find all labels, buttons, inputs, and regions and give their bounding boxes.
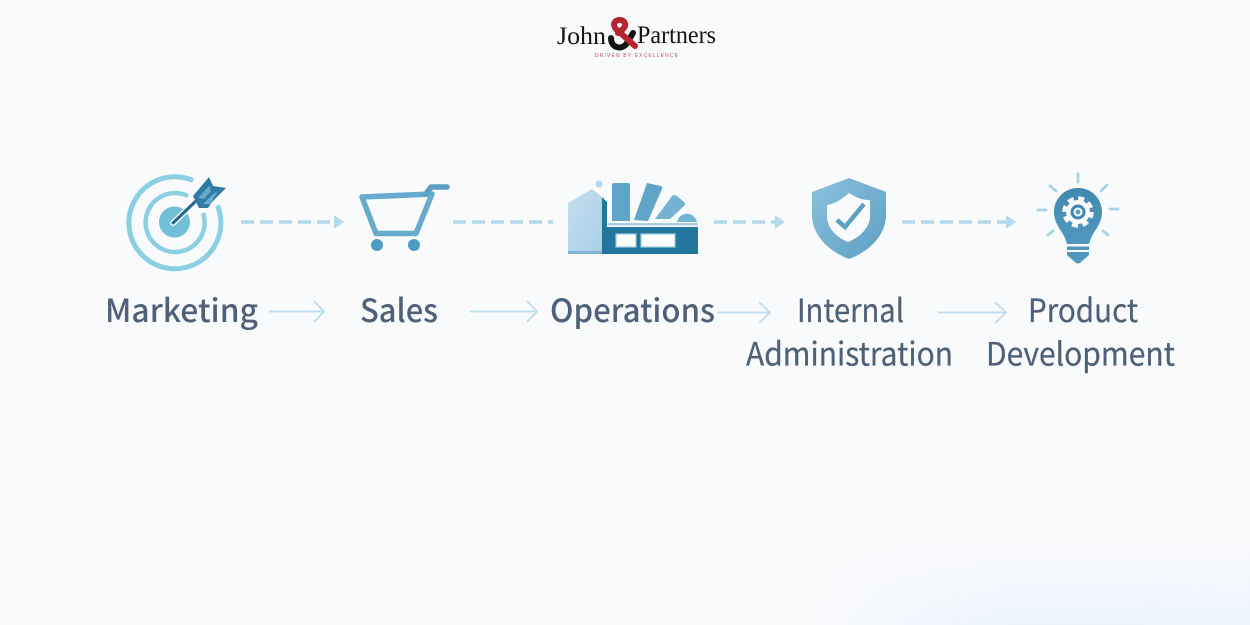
- label: Product Development: Product: [1028, 286, 1138, 332]
- label: Internal Administration: Administration: [746, 330, 953, 376]
- dashed arrow: shield to bulb: [902, 215, 1016, 229]
- label: Marketing: Marketing: [105, 286, 258, 332]
- logo ampersand: [611, 20, 635, 47]
- logo: [557, 20, 716, 59]
- icon: light bulb with gear: [1038, 174, 1118, 264]
- label: Product Development: Development: [986, 330, 1175, 376]
- thin arrow: Operations to Internal Administration: [717, 302, 770, 323]
- dashed arrow: target to cart: [241, 215, 344, 229]
- thin arrow: Sales to Operations: [470, 301, 537, 322]
- icon: shield with check: [812, 178, 886, 259]
- dashed line: cart to factory: [453, 220, 553, 224]
- dashed arrow: factory to shield: [714, 215, 785, 229]
- label: Operations: Operations: [550, 286, 715, 332]
- logo word: John: John: [557, 23, 607, 50]
- label: Internal Administration: Internal: [797, 286, 904, 332]
- logo tagline: DRIVEN BY EXCELLENCE: [595, 53, 679, 59]
- thin arrow: Internal Administration to Product Development: [938, 302, 1006, 323]
- logo word: Partners: Partners: [637, 22, 716, 49]
- label: Product Development: [986, 286, 1175, 376]
- label: Internal Administration: [746, 286, 953, 376]
- icon: factory with fan blades: [568, 180, 698, 254]
- thin arrow: Marketing to Sales: [269, 301, 324, 322]
- label: Sales: Sales: [360, 286, 438, 332]
- icon: target with arrow: [129, 177, 226, 269]
- icon: shopping cart: [362, 187, 447, 251]
